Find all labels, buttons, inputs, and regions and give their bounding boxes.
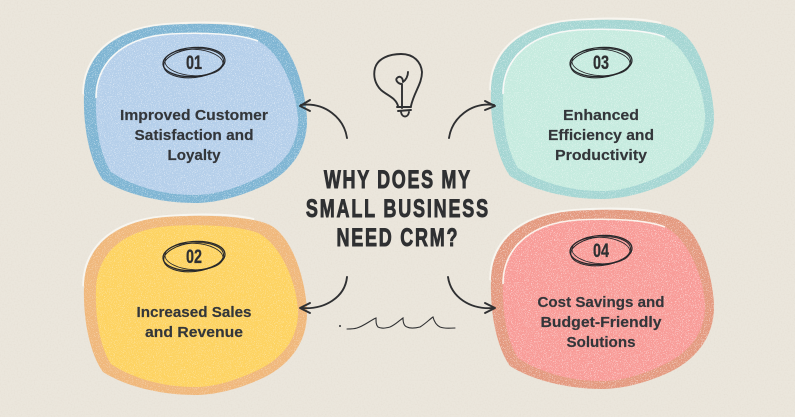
- title: WHY DOES MY: [324, 165, 470, 194]
- number badge 01: [162, 45, 226, 81]
- label 01: Loyalty: [168, 148, 220, 164]
- panel: 03 enhanced efficiency: [490, 19, 714, 199]
- number badge 04: 04: [593, 241, 609, 262]
- number badge 01: 01: [186, 53, 202, 74]
- label 04: Budget-Friendly: [540, 315, 662, 331]
- number badge 03: [569, 45, 633, 81]
- arrow: to panel 04: [448, 277, 495, 313]
- title: SMALL BUSINESS: [306, 194, 488, 223]
- number badge 02: 02: [186, 247, 202, 268]
- title: NEED CRM?: [337, 223, 457, 252]
- panel: 04 cost savings: [490, 209, 714, 389]
- arrow: to panel 03: [449, 101, 495, 138]
- label 03: Productivity: [555, 148, 647, 164]
- number badge 02: [162, 239, 226, 275]
- label 04: Cost Savings and: [538, 295, 664, 311]
- label 01: Improved Customer: [120, 108, 268, 124]
- arrow: to panel 02: [300, 277, 347, 313]
- label 03: Efficiency and: [548, 128, 654, 144]
- number badge 03: 03: [593, 53, 609, 74]
- label 04: Solutions: [566, 335, 636, 351]
- label 02: and Revenue: [145, 325, 243, 341]
- squiggle decoration: [339, 317, 455, 329]
- panel: 02 increased sales: [83, 215, 307, 395]
- label 01: Satisfaction and: [134, 128, 254, 144]
- arrow: to panel 01: [300, 100, 347, 138]
- number badge 04: [569, 233, 633, 269]
- panel: 01 improved customer satisfaction: [83, 23, 307, 203]
- label 02: Increased Sales: [136, 305, 252, 321]
- label 03: Enhanced: [563, 108, 639, 124]
- icon: light bulb: [374, 54, 422, 116]
